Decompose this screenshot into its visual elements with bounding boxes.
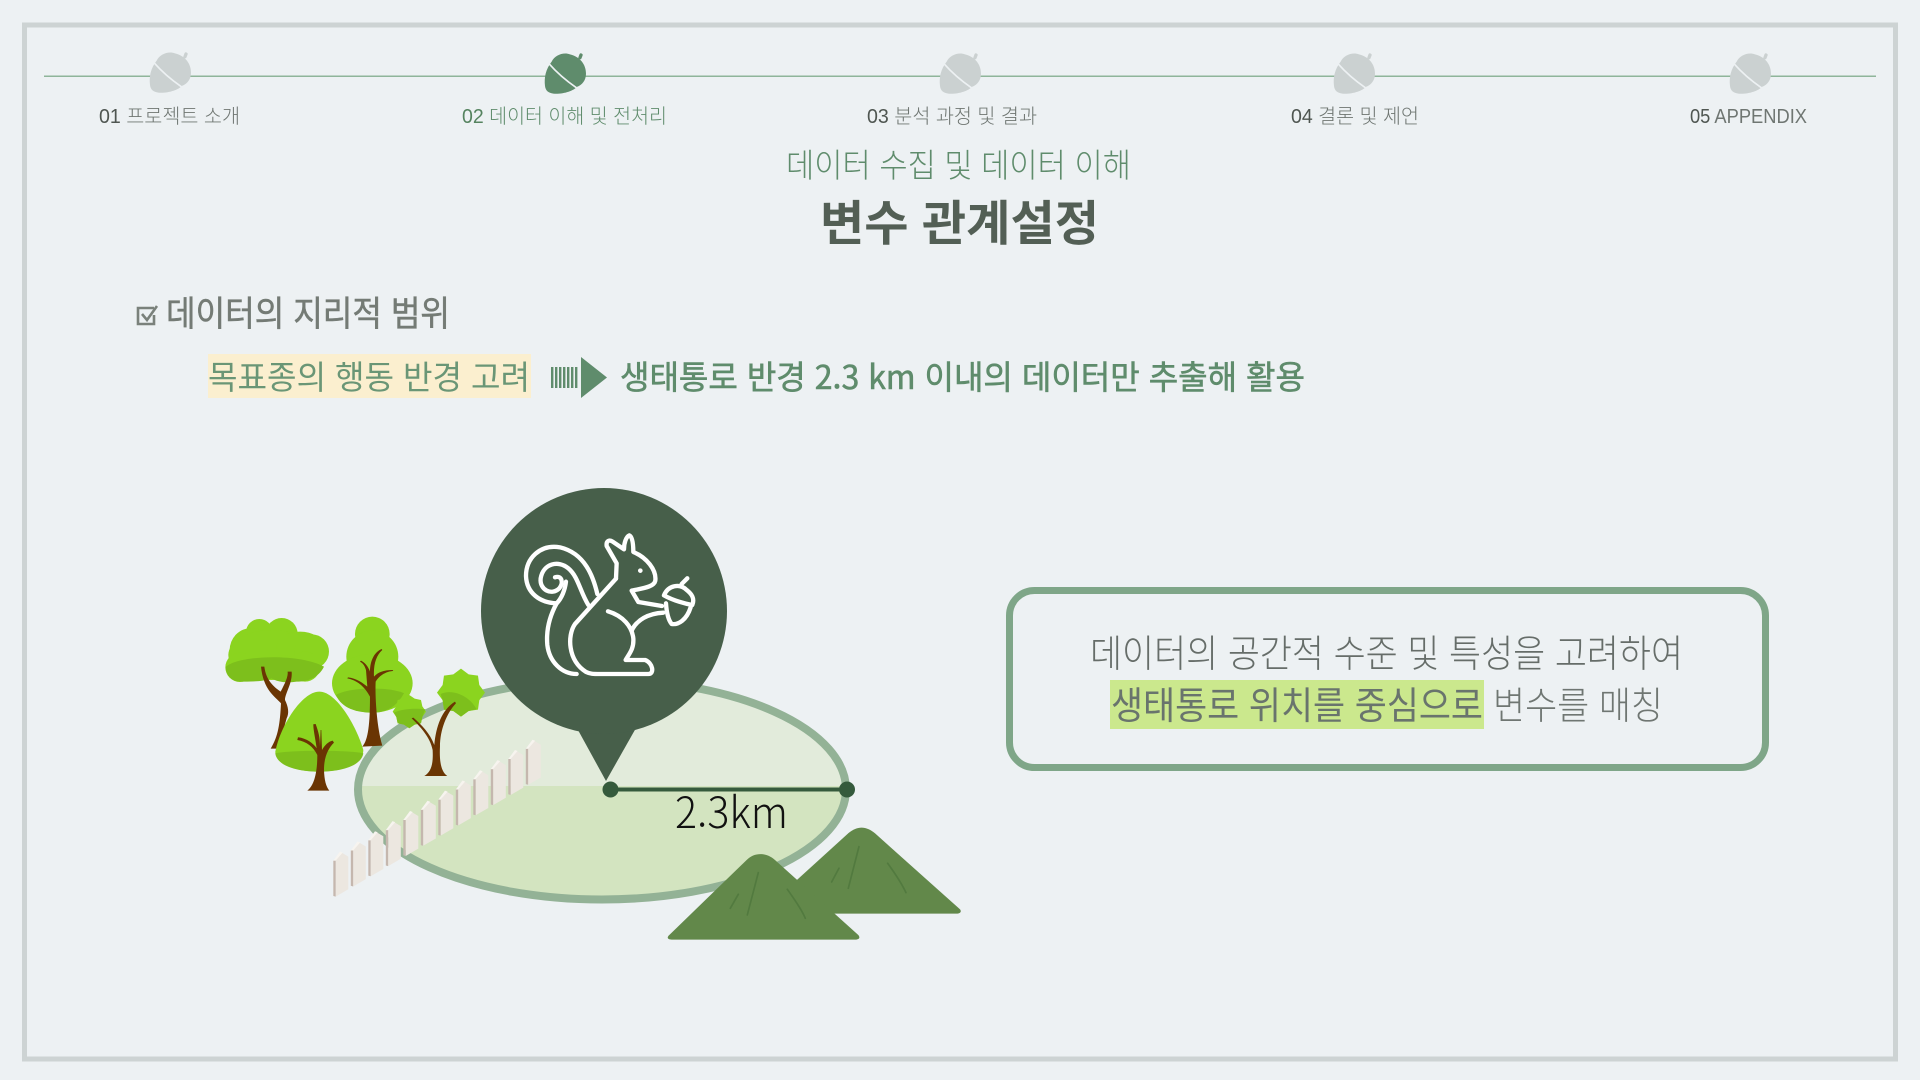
back mountain	[793, 828, 961, 914]
tree 2	[275, 692, 363, 791]
arrow	[551, 357, 607, 398]
icon: squirrel with acorn	[526, 535, 693, 674]
highlighted condition	[208, 354, 531, 398]
condition text: 목표종의 행동 반경 고려	[208, 359, 530, 396]
callout box	[1010, 590, 1766, 768]
icon: acorn step 4	[1334, 54, 1375, 94]
nav label 04: 04 결론 및 제언	[1291, 105, 1419, 128]
highlight background	[208, 354, 531, 398]
icon: acorn step 5	[1730, 54, 1771, 94]
callout highlight	[1110, 680, 1484, 729]
radius label: 2.3km	[675, 779, 788, 841]
front mountain	[668, 854, 859, 940]
icon: acorn step 2 active	[545, 54, 586, 94]
map illustration	[225, 488, 961, 940]
main title: 변수 관계설정	[820, 198, 1099, 251]
navigation timeline	[44, 53, 1876, 128]
icon: acorn step 1	[150, 53, 191, 93]
location pin	[481, 488, 727, 781]
tree 1	[225, 618, 329, 749]
heading: geographic scope: 데이터의 지리적 범위	[166, 295, 450, 334]
habitat ellipse	[350, 680, 860, 906]
icon: checkbox	[138, 306, 157, 324]
section subtitle: 데이터 수집 및 데이터 이해	[786, 147, 1131, 184]
nav label 03: 03 분석 과정 및 결과	[867, 105, 1037, 128]
tree 3	[332, 617, 413, 747]
trees	[225, 617, 485, 791]
mountains	[668, 828, 961, 940]
timeline line	[44, 76, 1876, 77]
radius line	[602, 782, 855, 798]
nav label 05: 05 APPENDIX	[1690, 106, 1807, 128]
icon: acorn step 3	[940, 54, 981, 94]
callout line 2: 생태통로 위치를 중심으로	[1111, 686, 1483, 728]
callout line 2 rest: 변수를 매칭	[1493, 686, 1663, 728]
nav label 01: 01 프로젝트 소개	[99, 105, 240, 128]
callout line 1: 데이터의 공간적 수준 및 특성을 고려하여	[1090, 634, 1683, 676]
fence	[333, 740, 541, 897]
tree 4	[393, 669, 485, 776]
callout border	[1010, 590, 1766, 768]
result statement: 생태통로 반경 2.3 km 이내의 데이터만 추출해 활용	[620, 351, 1305, 399]
nav label 02: 02 데이터 이해 및 전처리	[462, 105, 667, 128]
